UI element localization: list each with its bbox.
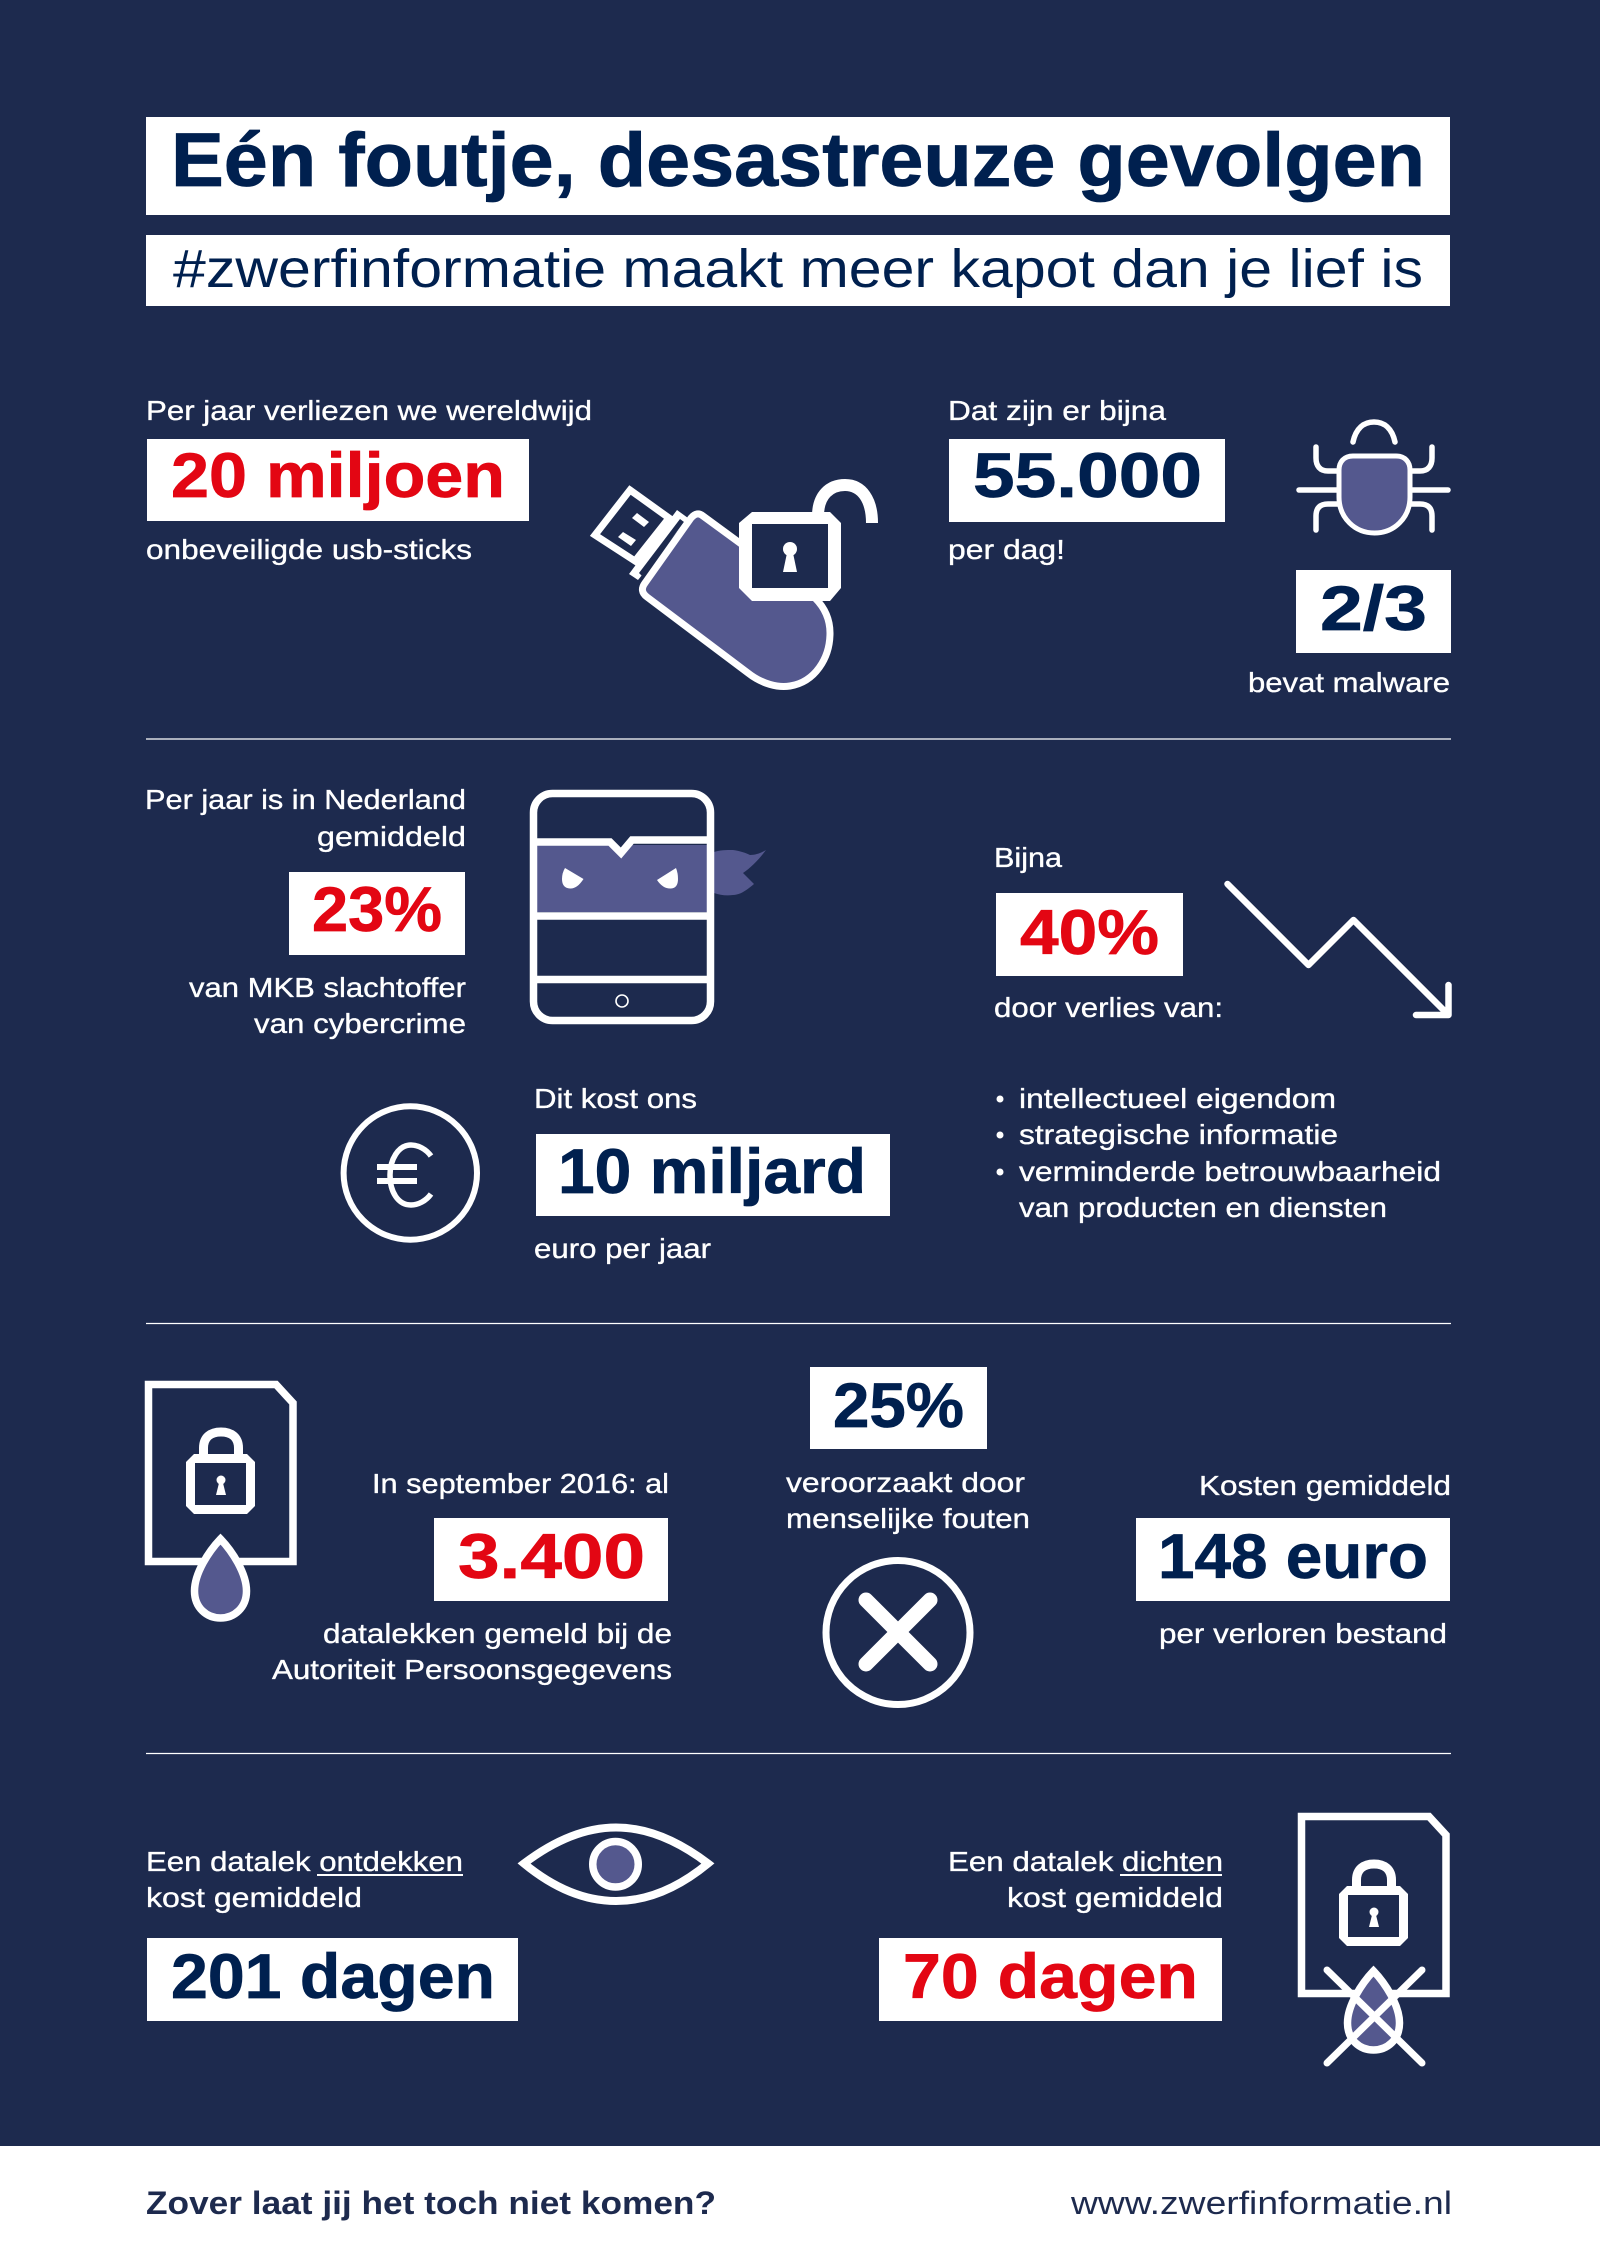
text: een datalek ontdekken: kost gemiddeld: [146, 1882, 362, 1913]
text: door verlies van: door verlies van:: [994, 992, 1223, 1023]
stat: 2/3: 2/3: [1320, 574, 1427, 644]
panel: 10 miljard: [534, 1083, 890, 1264]
stat: 70 dagen: [879, 1938, 1222, 2021]
stat: 25%: 25%: [833, 1371, 964, 1441]
stat: 70 dagen: 70 dagen: [903, 1942, 1198, 2012]
stat: 23%: [289, 872, 465, 955]
list: verlies: verminderde betrouwbaarheid: [1019, 1156, 1441, 1187]
stat: 148 euro: [1136, 1518, 1450, 1601]
text: een datalek dichten: [948, 1846, 1223, 1913]
text: van MKB slachtoffer: [189, 972, 466, 1039]
text: per verloren bestand: per verloren bestand: [1159, 1618, 1447, 1649]
panel: 55.000 per dag: [948, 395, 1225, 565]
stat: 3.400: 3.400: [458, 1522, 645, 1592]
stat: 2/3: [1296, 570, 1451, 653]
stat: 10 miljard: 10 miljard: [558, 1137, 866, 1207]
text: per jaar in Nederland: gemiddeld: [317, 821, 466, 852]
icon: usb stick with open lock: [595, 485, 872, 686]
stat: 148 euro: 148 euro: [1158, 1522, 1428, 1592]
text: in september 2016: In september 2016: al: [372, 1468, 669, 1499]
panel: bijna 40%: [994, 842, 1223, 1023]
list: verlies: van producten en diensten: [1019, 1192, 1387, 1223]
stat: 3.400: [434, 1518, 668, 1601]
text: veroorzaakt door: [786, 1467, 1030, 1534]
panel: datalekken: [272, 1468, 672, 1685]
text: per dag: per dag!: [948, 534, 1065, 565]
icon: leaking document with lock: [148, 1384, 293, 1618]
panel: usb-sticks: [146, 395, 592, 565]
arrow: downward trend: [1228, 884, 1448, 1015]
icon: bug: [1299, 422, 1448, 533]
stat: 20 miljoen: [147, 439, 529, 521]
text: website: www.zwerfinformatie.nl: [1070, 2185, 1452, 2221]
stat: 55.000: 55.000: [973, 441, 1202, 511]
text: een datalek ontdekken: Een datalek ontdekken: [146, 1846, 463, 1877]
text: veroorzaakt door: veroorzaakt door: [786, 1467, 1025, 1498]
text: euro per jaar: euro per jaar: [534, 1233, 711, 1264]
panel: kosten per bestand: [1136, 1470, 1451, 1649]
text: per jaar in Nederland: Per jaar is in Nederland: [145, 784, 466, 815]
text: call to action: Zover laat jij het toch niet komen?: [146, 2185, 716, 2221]
icon: x in circle: [826, 1560, 970, 1704]
text: kosten gemiddeld: Kosten gemiddeld: [1199, 1470, 1451, 1501]
text: veroorzaakt door: menselijke fouten: [786, 1503, 1030, 1534]
list: verlies: [996, 1083, 1441, 1223]
footer: [0, 2146, 1600, 2263]
text: een datalek ontdekken: [146, 1846, 463, 1913]
text: een datalek dichten: Een datalek dichten: [948, 1846, 1223, 1877]
stat: 40%: 40%: [1020, 898, 1159, 968]
panel: MKB cybercrime: [145, 784, 466, 1039]
stat: 55.000: [949, 439, 1225, 522]
title: Eén foutje, desastreuze gevolgen: [171, 118, 1425, 203]
text: datalekken gemeld: [272, 1618, 672, 1685]
text: bijna: Bijna: [994, 842, 1062, 873]
stat: 201 dagen: 201 dagen: [171, 1942, 495, 2012]
text: dit kost ons: Dit kost ons: [534, 1083, 697, 1114]
text: per jaar verliezen: Per jaar verliezen we wereldwijd: [146, 395, 592, 426]
stat: 23%: 23%: [312, 875, 442, 945]
text: datalekken gemeld: Autoriteit Persoonsgegevens: [272, 1654, 672, 1685]
list: verlies: strategische informatie: [1019, 1119, 1338, 1150]
icon: euro coin: [344, 1106, 477, 1240]
text: van MKB slachtoffer: van MKB slachtoffer: [189, 972, 466, 1003]
text: dat zijn er bijna: Dat zijn er bijna: [948, 395, 1166, 426]
panel: datalek dichten: [879, 1816, 1446, 2063]
panel: menselijke fouten: [786, 1367, 1030, 1704]
stat: 25%: [810, 1367, 987, 1449]
text: datalekken gemeld: datalekken gemeld bij de: [323, 1618, 672, 1649]
stat: 20 miljoen: 20 miljoen: [171, 441, 505, 511]
panel: 2/3 bevat malware: [1248, 570, 1451, 698]
stat: 40%: [996, 893, 1183, 976]
text: onbeveiligde usb-sticks: onbeveiligde usb-sticks: [146, 534, 472, 565]
icon: masked phone: [534, 794, 766, 1020]
icon: closed leak document: [1302, 1816, 1446, 2063]
text: van MKB slachtoffer: van cybercrime: [254, 1008, 466, 1039]
panel: datalek ontdekken: [146, 1828, 708, 2021]
text: per jaar in Nederland: [145, 784, 466, 852]
icon: eye: [524, 1828, 708, 1901]
text: bevat malware: bevat malware: [1248, 667, 1450, 698]
text: een datalek dichten: kost gemiddeld: [1007, 1882, 1223, 1913]
subtitle: #zwerfinformatie maakt meer kapot dan je lief is: [173, 239, 1423, 299]
list: verlies: intellectueel eigendom: [1019, 1083, 1336, 1114]
